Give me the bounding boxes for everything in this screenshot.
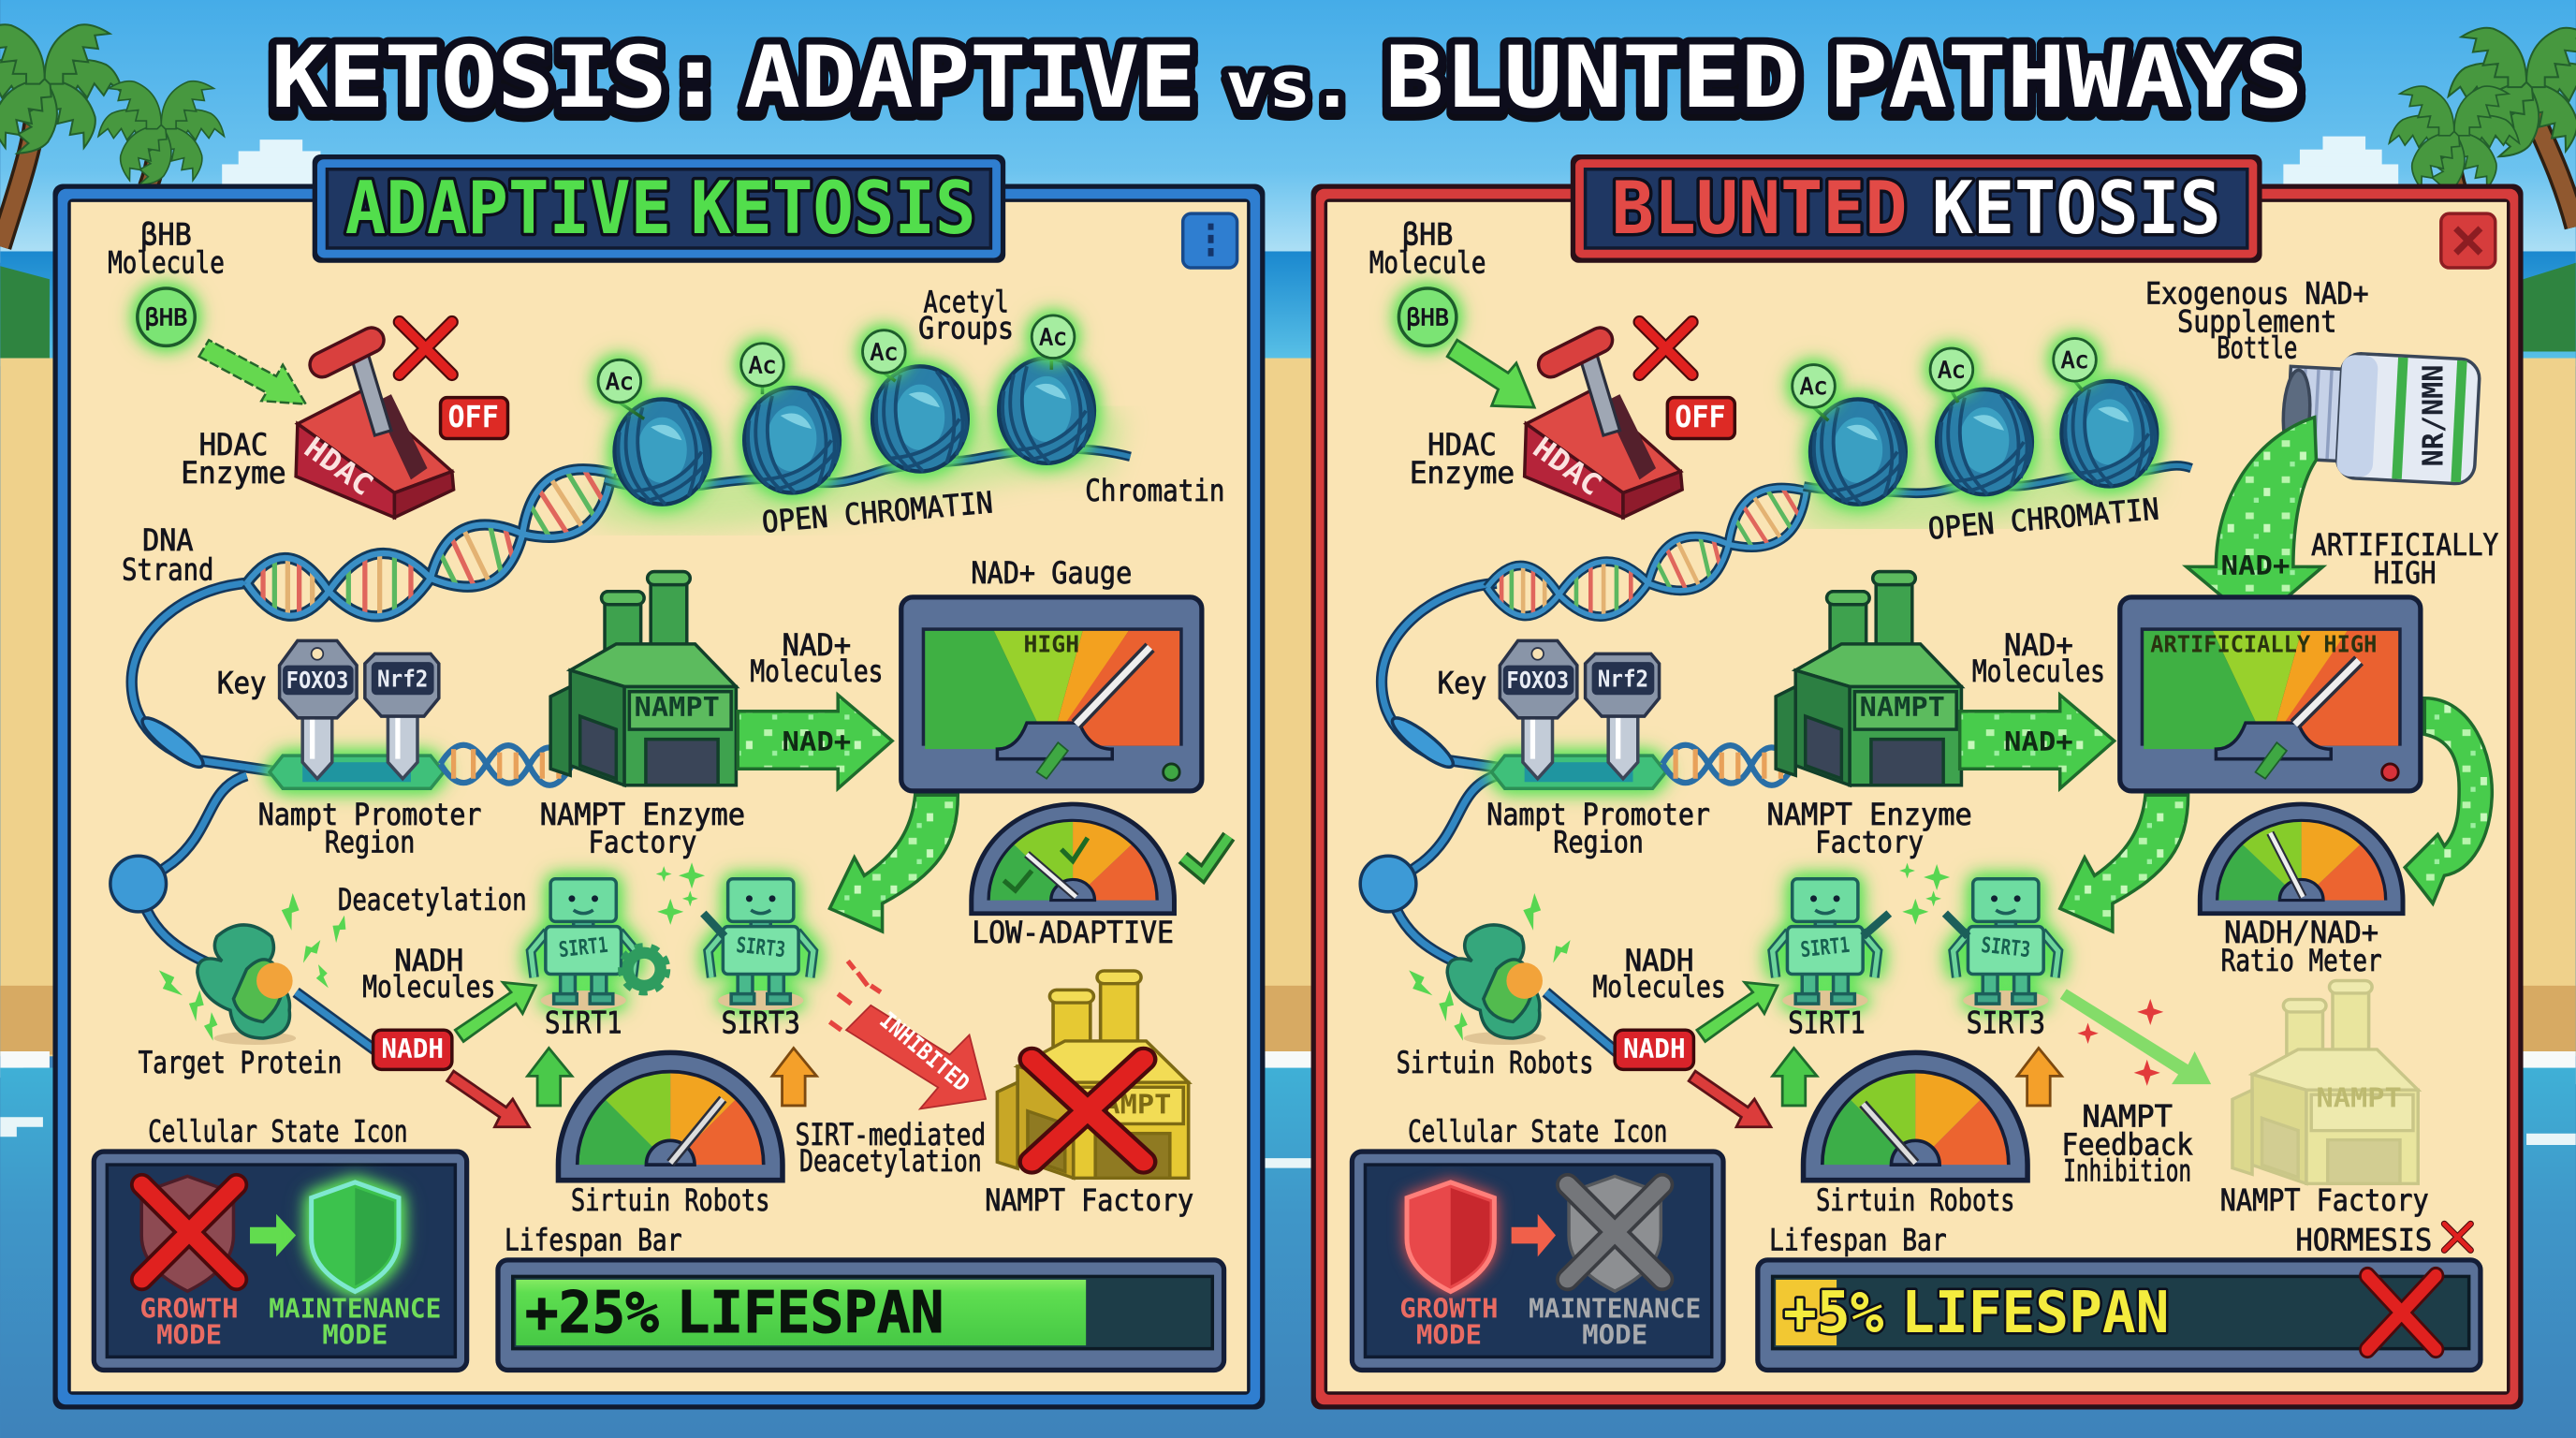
icons: acetyl groups: Ac [2061,346,2088,374]
label: key: Key [1438,667,1486,700]
robot: SIRT3: SIRT3 [1980,933,2031,962]
DNA strand tube [1360,583,1619,1055]
label: deacetylation: Deacetylation [338,884,527,917]
icon: target protein [154,891,352,1045]
cellular state panel [1352,1152,1723,1370]
label: lifespan bar: Lifespan Bar [1769,1224,1947,1257]
label: NAMPT enzyme factory [1767,799,1972,860]
label: SIRT1: SIRT1 [1788,1007,1866,1041]
icon: ghost factory [2232,981,2418,1183]
label: NADH/NAD+ ratio meter: NADH/NAD+ [2224,917,2378,950]
badge: off: OFF [447,401,499,434]
label: NAMPT feedback inhibition: Inhibition [2063,1155,2191,1189]
label: exogenous supplement bottle: Supplement [2177,305,2336,339]
panel frame [52,184,1265,1410]
title [271,27,2303,127]
icon: FOXO3 key [1500,640,1577,779]
label: bHB molecule: βHB [140,218,192,252]
icon: FOXO3 key: FOXO3 [286,667,348,694]
icons: acetyl groups: Ac [606,368,634,395]
label: NADH molecules: NADH [394,945,463,978]
icon: NAMPT factory [550,572,736,785]
label: NADH/NAD+ ratio meter [2221,917,2382,978]
label: bHB molecule: βHB [1402,218,1453,252]
cellular state panel: MODE [322,1319,388,1350]
label: NAMPT feedback inhibition: NAMPT [2082,1101,2173,1135]
label: NAD+ molecules: Molecules [1972,655,2105,689]
arrow: up green [528,1049,572,1106]
arrow: up orange [2017,1049,2061,1106]
label: HDAC enzyme: Enzyme [181,457,286,491]
cellular state panel: GROWTH [1399,1293,1499,1324]
icons: acetyl groups [598,315,1075,418]
header: adaptive ketosis: ADAPTIVE KETOSIS [345,167,976,251]
badge: off [441,398,508,439]
DNA helix [247,468,611,616]
NAD+ gauge: HIGH [1023,631,1079,658]
icon: HDAC lever [1525,340,1682,518]
chromatin glow [600,441,1118,500]
label: bHB molecule [1369,218,1486,280]
icon: NAMPT factory [1776,572,1961,785]
title: KETOSIS: ADAPTIVE [271,27,1196,127]
robot: SIRT3 [656,862,813,1010]
panel frame [1311,184,2524,1410]
icon: Nrf2 key [365,653,439,779]
arrow: up green [1773,1049,1817,1106]
label: NAMPT feedback inhibition: Feedback [2061,1129,2193,1163]
icons: acetyl groups: Ac [749,351,776,378]
label: Nampt promoter region [258,799,481,860]
arrow: up orange [772,1049,816,1106]
icon: yellow factory crossed [997,971,1189,1178]
icon: target protein [1404,891,1575,1045]
cellular state panel: MODE [1416,1319,1482,1350]
label: SIRT3: SIRT3 [722,1007,800,1041]
label: acetyl groups: Groups [918,312,1014,345]
cellular state panel: GROWTH [139,1293,239,1324]
icon: NR/NMN bottle: NR/NMN [2418,365,2451,466]
arrow: NAD+ to gauge: NAD+ [2004,726,2073,757]
label: DNA strand [122,524,213,587]
icon: red x [400,322,452,374]
label: NAD+ molecules [750,629,883,689]
label: NAD+ molecules: Molecules [750,655,883,689]
promoter region [270,756,444,788]
label: HDAC enzyme [1410,429,1515,491]
label: NAD+ gauge: NAD+ Gauge [971,557,1132,591]
promoter region [1492,756,1666,788]
label: sirtuin robots: Sirtuin Robots [571,1184,769,1218]
label: NAMPT enzyme factory: Factory [1815,827,1924,860]
icon: check [1183,836,1229,874]
arrow: pouring NAD+ [2187,418,2322,624]
icon: bHB molecule: βHB [145,303,187,330]
label: DNA strand: Strand [122,553,213,587]
label: open chromatin: OPEN CHROMATIN [761,486,994,540]
header: blunted ketosis [1571,154,2262,263]
robot: SIRT1: SIRT1 [558,933,609,962]
label: NAMPT enzyme factory [540,799,745,860]
label: chromatin: Chromatin [1085,475,1224,508]
label: artificially high: ARTIFICIALLY [2311,529,2498,563]
label: NAD+ molecules: NAD+ [783,629,851,663]
label: hormesis: HORMESIS [2296,1224,2432,1257]
lifespan bar: +25% LIFESPAN [525,1280,944,1346]
cellular state panel: MAINTENANCE [269,1293,441,1324]
NADH/NAD+ ratio meter [2200,804,2403,914]
arrow: dashed bHB to HDAC [199,340,306,404]
palm trees right [2389,13,2576,227]
arrow: inhibited [829,961,986,1108]
label: HDAC enzyme [181,429,286,491]
label: NAMPT enzyme factory: Factory [588,827,696,860]
label: sirtuin robots: Sirtuin Robots [1397,1047,1593,1080]
icon: NAMPT factory: NAMPT [1860,692,1945,723]
robot: SIRT3 [1899,863,2058,1010]
label: NADH/NAD+ ratio meter: Ratio Meter [2221,945,2382,978]
arrow: NADH to gauge [1689,1071,1771,1127]
arrow: NADH to gauge [447,1071,529,1127]
icon: NR/NMN bottle [2280,350,2481,485]
label: SIRT1: SIRT1 [545,1007,622,1041]
label: NAMPT factory: NAMPT Factory [2220,1184,2429,1218]
icon: HDAC lever: HDAC [298,431,379,503]
label: NADH molecules: NADH [1625,945,1693,978]
label: HDAC enzyme: Enzyme [1410,457,1515,491]
header: blunted ketosis: BLUNTED [1612,167,1908,251]
label: Nampt promoter region: Nampt Promoter [258,799,481,832]
robot: SIRT1: SIRT1 [1799,933,1851,962]
icon: bHB molecule [138,288,195,345]
icon: NAMPT factory: NAMPT [635,692,720,723]
icons: acetyl groups: Ac [1800,373,1827,400]
icons: acetyl groups: Ac [1938,357,1966,384]
robot: SIRT1 [531,879,667,1010]
arrow: gauge to ratio meter [2405,698,2492,903]
sirtuin gauge [1804,1052,2027,1181]
arrow: gauge to SIRT [829,795,958,932]
chromatin [1804,381,2191,505]
icon: FOXO3 key: FOXO3 [1506,667,1569,694]
chromatin glow [1804,463,2152,505]
arrow: bHB to HDAC [1447,340,1534,407]
cellular state panel: MODE [1582,1319,1647,1350]
label: Nampt promoter region [1486,799,1710,860]
icon: yellow factory crossed: NAMPT [1086,1090,1171,1121]
NAD+ gauge artificially high: ARTIFICIALLY HIGH [2150,631,2377,658]
cellular state panel [94,1152,467,1370]
label: Nampt promoter region: Nampt Promoter [1486,799,1710,832]
label: sirt-mediated deacetylation: SIRT-mediated [796,1119,986,1152]
label: low-adaptive: LOW-ADAPTIVE [972,917,1174,950]
label: open chromatin: OPEN CHROMATIN [1926,492,2160,547]
icon: Nrf2 key: Nrf2 [377,665,428,692]
label: NADH molecules [362,945,495,1005]
sirtuin gauge [558,1052,783,1181]
icon: ghost factory: NAMPT [2316,1083,2402,1114]
mini DNA [1662,745,1793,785]
label: Nampt promoter region: Region [1553,827,1644,860]
arrow: NAD+ to gauge [738,695,892,788]
title: vs. [1225,49,1354,122]
label: cellular state icon: Cellular State Icon [1408,1116,1667,1150]
header: blunted ketosis: KETOSIS [1932,167,2221,251]
icon: info button [1183,213,1237,268]
arrow: feedback inhibition [2060,989,2211,1086]
icon: close button [2441,213,2496,268]
chromatin [605,359,1131,505]
lifespan bar [498,1260,1224,1370]
lifespan bar [1758,1260,2481,1370]
arrow: inhibited: INHIBITED [874,1006,975,1097]
icon: Nrf2 key: Nrf2 [1598,665,1648,692]
robot: SIRT1 [1773,879,1889,1010]
arrow: NADH to SIRT1 [1697,982,1778,1041]
panel: adaptive ketosis [52,154,1265,1410]
icon: bHB molecule [1398,288,1456,345]
label: target protein: Target Protein [139,1047,342,1080]
arrow: NAD+ to gauge: NAD+ [783,726,851,757]
label: NAMPT enzyme factory: NAMPT Enzyme [1767,799,1972,832]
LOW-ADAPTIVE gauge [972,804,1174,914]
label: NAMPT factory: NAMPT Factory [985,1184,1193,1218]
panel: blunted ketosis [1311,154,2524,1410]
badge: NADH: NADH [1623,1034,1686,1064]
label: NAD+ molecules: NAD+ [2004,629,2073,663]
NAD+ gauge [901,597,1202,791]
label: Nampt promoter region: Region [325,827,415,860]
label: sirt-mediated deacetylation: Deacetylation [799,1145,982,1179]
mini DNA [441,745,572,785]
icon: Nrf2 key [1586,653,1660,779]
label: sirtuin robots: Sirtuin Robots [1816,1184,2014,1218]
badge: NADH [373,1030,452,1069]
label: bHB molecule [108,218,225,280]
badge: NADH [1615,1030,1693,1069]
DNA strand tube [110,583,381,1055]
label: acetyl groups [918,286,1014,345]
label: NADH molecules [1593,945,1726,1005]
icon: HDAC lever [296,340,454,518]
clouds [222,137,2398,187]
label: sirt-mediated deacetylation [796,1119,986,1179]
icons: acetyl groups: Ac [871,338,898,365]
label: NAMPT feedback inhibition [2061,1101,2193,1189]
label: NAD+ molecules [1972,629,2105,689]
label: bHB molecule: Molecule [108,246,225,280]
cellular state panel: MODE [156,1319,222,1350]
badge: off [1667,398,1734,439]
label: HDAC enzyme: HDAC [199,429,268,462]
title: BLUNTED PATHWAYS [1385,27,2303,127]
icon: FOXO3 key [280,640,357,779]
label: lifespan bar: Lifespan Bar [505,1224,682,1257]
NAD+ gauge artificially high [2120,597,2421,791]
islands [0,263,2576,359]
palm trees left [0,10,224,246]
badge: NADH: NADH [381,1034,444,1064]
cellular state panel: MAINTENANCE [1529,1293,1701,1324]
label: key: Key [217,667,267,700]
label: NAMPT enzyme factory: NAMPT Enzyme [540,799,745,832]
lifespan bar: +5% LIFESPAN [1783,1280,2169,1346]
badge: off: OFF [1675,401,1726,434]
label: cellular state icon: Cellular State Icon [148,1116,407,1150]
robot: SIRT3: SIRT3 [735,933,786,962]
label: HDAC enzyme: HDAC [1427,429,1497,462]
label: artificially high [2311,529,2498,591]
DNA helix [1487,487,1807,617]
arrow: NADH to SIRT1 [455,982,535,1041]
icon: red x [1640,322,1692,374]
label: bHB molecule: Molecule [1369,246,1486,280]
arrow: pouring NAD+: NAD+ [2221,550,2290,581]
icon: HDAC lever: HDAC [1527,431,1607,503]
icons: acetyl groups: Ac [1039,323,1067,350]
icon: big red x [1032,1059,1144,1162]
label: SIRT3: SIRT3 [1967,1007,2045,1041]
label: exogenous supplement bottle [2145,278,2369,366]
label: exogenous supplement bottle: Bottle [2217,332,2297,366]
icons: acetyl groups [1793,338,2096,420]
label: exogenous supplement bottle: Exogenous NAD+ [2145,278,2369,312]
label: acetyl groups: Acetyl [923,286,1009,319]
label: NADH molecules: Molecules [362,971,495,1005]
icon: bHB molecule: βHB [1406,303,1449,330]
arrow: NAD+ to gauge [1960,695,2115,788]
label: artificially high: HIGH [2374,557,2437,591]
label: DNA strand: DNA [142,524,193,558]
label: NADH molecules: Molecules [1593,971,1726,1005]
arrow: gauge to SIRT [2060,795,2188,932]
